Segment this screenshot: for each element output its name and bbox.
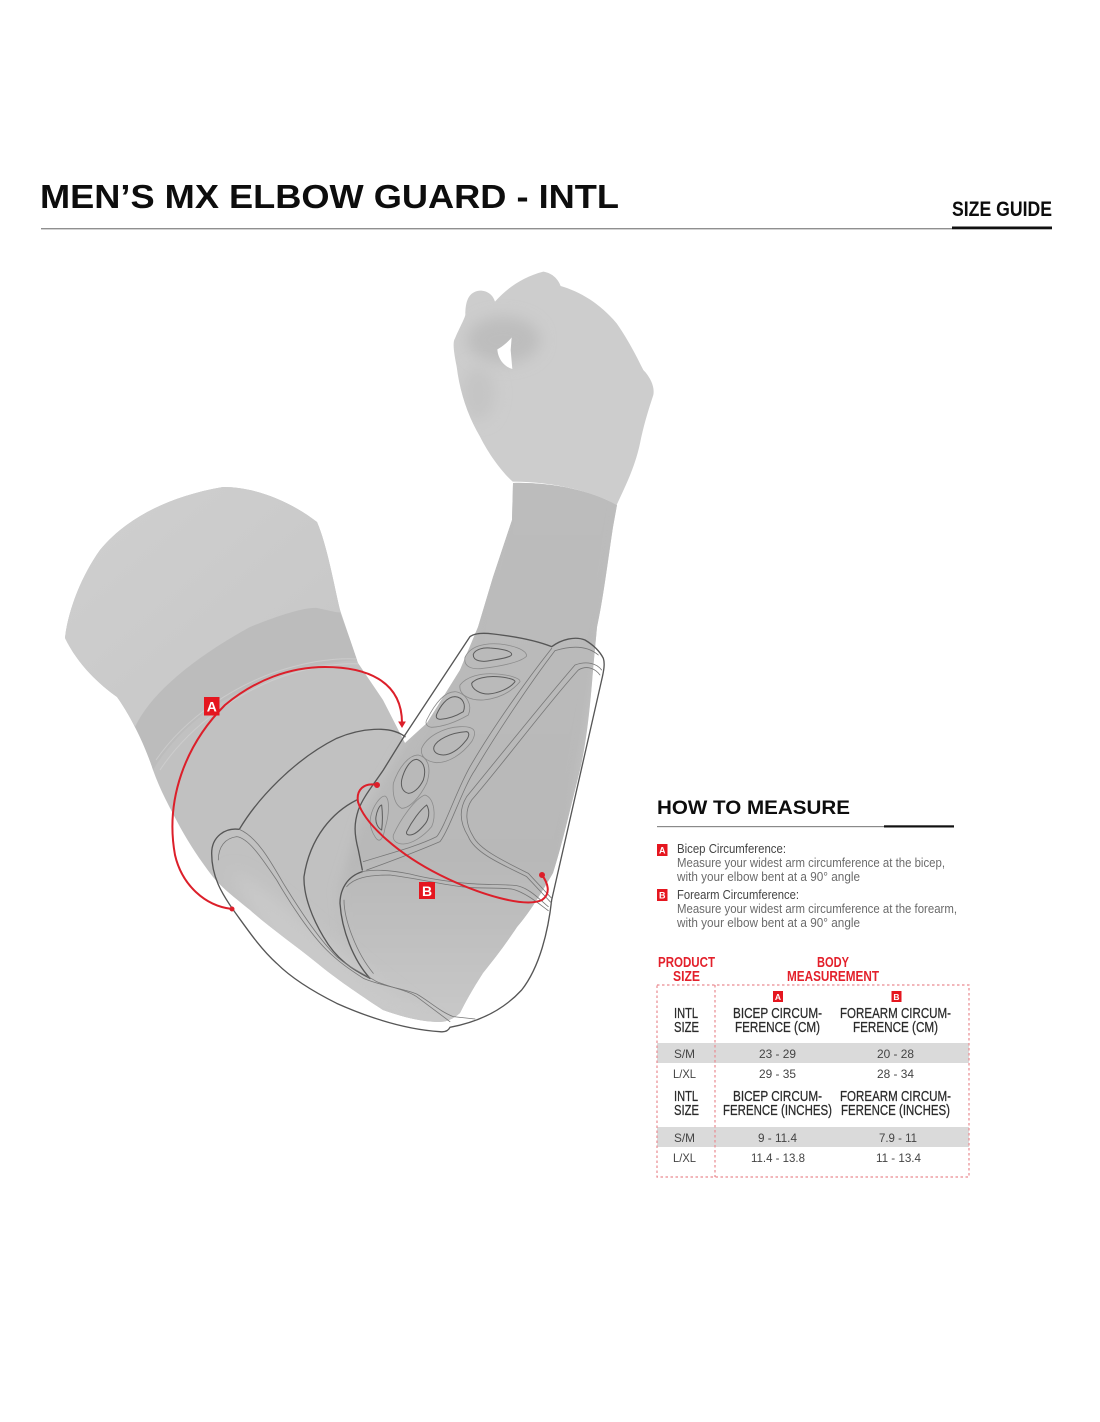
centimetre values: 28 - 34 xyxy=(877,1067,914,1081)
forearm instructions: B xyxy=(659,890,666,900)
centimetre header row: SIZE xyxy=(674,1020,699,1036)
guard inner lines xyxy=(218,647,602,1022)
table column headings: PRODUCT xyxy=(658,955,715,971)
bicep instructions: with your elbow bent at a 90° angle xyxy=(676,870,860,884)
dotted table frame xyxy=(657,985,969,1177)
centimetre values: S/M xyxy=(674,1047,695,1061)
bicep instructions xyxy=(657,842,945,884)
centimetre header row: FERENCE (CM) xyxy=(735,1020,820,1036)
centimetre header row xyxy=(674,1006,951,1036)
bicep instructions: Measure your widest arm circumference at the bicep, xyxy=(677,856,945,870)
how to measure heading: HOW TO MEASURE xyxy=(657,797,850,819)
forearm instructions xyxy=(657,888,957,930)
guard outer contour xyxy=(212,633,604,1032)
measurement arc A xyxy=(172,667,405,910)
centimetre header row: FOREARM CIRCUM- xyxy=(840,1006,951,1022)
shaded rows xyxy=(657,1043,969,1147)
inches values: 11 - 13.4 xyxy=(876,1151,921,1165)
badge A: A xyxy=(207,698,217,714)
centimetre header row: INTL xyxy=(674,1006,698,1022)
elbow guard outlines xyxy=(212,633,604,1032)
forearm instructions: Forearm Circumference: xyxy=(677,888,799,902)
inches header row: BICEP CIRCUM- xyxy=(733,1089,822,1105)
guard vent pods xyxy=(370,644,527,844)
inches header row: FOREARM CIRCUM- xyxy=(840,1089,951,1105)
hand xyxy=(454,272,654,505)
badge A xyxy=(204,697,220,716)
size table xyxy=(657,955,969,1177)
inches values: L/XL xyxy=(673,1151,696,1165)
table badge B: B xyxy=(893,992,900,1002)
centimetre header row: FERENCE (CM) xyxy=(853,1020,938,1036)
inches values: 9 - 11.4 xyxy=(758,1131,797,1145)
table column headings xyxy=(658,955,879,985)
forearm instructions: with your elbow bent at a 90° angle xyxy=(676,916,860,930)
arm illustration xyxy=(40,272,654,1040)
inches values: 7.9 - 11 xyxy=(879,1131,917,1145)
centimetre values: 20 - 28 xyxy=(877,1047,914,1061)
title: MEN’S MX ELBOW GUARD - INTL xyxy=(40,178,619,215)
badge B xyxy=(419,882,435,899)
inches header row: FERENCE (INCHES) xyxy=(723,1103,832,1119)
inches header row: FERENCE (INCHES) xyxy=(841,1103,950,1119)
centimetre header row: BICEP CIRCUM- xyxy=(733,1006,822,1022)
centimetre values: L/XL xyxy=(673,1067,696,1081)
centimetre values: 23 - 29 xyxy=(759,1047,796,1061)
inches header row xyxy=(674,1089,951,1119)
bicep instructions: A xyxy=(659,846,666,856)
forearm instructions: Measure your widest arm circumference at the forearm, xyxy=(677,902,957,916)
inches values: 11.4 - 13.8 xyxy=(751,1151,805,1165)
arm silhouette xyxy=(65,482,617,1022)
table column headings: BODY xyxy=(817,955,849,971)
measurement arc B xyxy=(358,783,548,902)
inches values: S/M xyxy=(674,1131,695,1145)
bicep instructions: Bicep Circumference: xyxy=(677,842,786,856)
table column headings: SIZE xyxy=(673,969,700,985)
badge B: B xyxy=(422,883,432,899)
inches header row: SIZE xyxy=(674,1103,699,1119)
header rule xyxy=(41,226,1052,229)
table badge B xyxy=(892,991,902,1002)
inches values xyxy=(673,1131,921,1165)
heading rule xyxy=(657,825,954,828)
centimetre values xyxy=(673,1047,914,1081)
centimetre values: 29 - 35 xyxy=(759,1067,796,1081)
table column headings: MEASUREMENT xyxy=(787,969,879,985)
size guide label: SIZE GUIDE xyxy=(952,198,1052,221)
inches header row: INTL xyxy=(674,1089,698,1105)
table badge A: A xyxy=(775,992,781,1002)
table badge A xyxy=(773,991,783,1002)
